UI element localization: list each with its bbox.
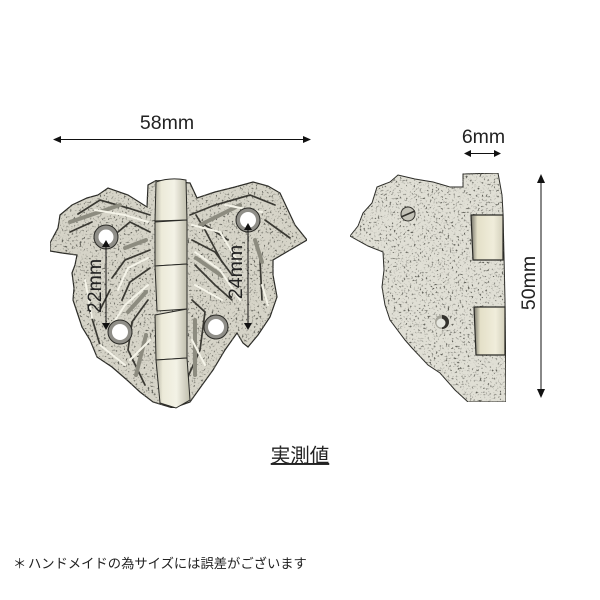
- side hole: [435, 315, 449, 329]
- screw hole: upper right: [236, 208, 260, 232]
- slot screw: [401, 207, 415, 221]
- upper knuckle: [471, 215, 503, 260]
- leaf veins, light: [85, 205, 268, 365]
- leaf veins, dark: [70, 195, 290, 390]
- screw hole: lower left: [108, 320, 132, 344]
- side plate outline: [350, 173, 506, 402]
- label: 50mm: 50mm: [518, 256, 540, 310]
- lower knuckle: [474, 307, 505, 355]
- heading: measured values: 実測値: [271, 445, 329, 467]
- arrow: 24mm: [244, 223, 252, 330]
- arrow: 50mm: [537, 174, 545, 398]
- width label: 58mm: 58mm: [140, 112, 194, 134]
- arrow: 58mm width: [53, 136, 311, 143]
- arrow: 6mm: [464, 150, 501, 157]
- arrow: 22mm: [102, 240, 110, 330]
- footnote: ＊: [13, 556, 26, 571]
- label: 6mm: 6mm: [462, 126, 505, 148]
- screw hole: upper left: [94, 225, 118, 249]
- label: 24mm: 24mm: [225, 245, 247, 299]
- label: 22mm: 22mm: [84, 259, 106, 313]
- screw hole: lower right: [204, 315, 228, 339]
- leaf plate outline: [50, 180, 307, 408]
- hinge knuckles: [155, 179, 190, 408]
- footnote: ハンドメイドの為サイズには誤差がございます: [28, 555, 307, 571]
- side view: hinge profile: [350, 173, 506, 402]
- front view: leaf hinge: [50, 179, 307, 408]
- leaf veins, mid grey shading: [70, 205, 262, 375]
